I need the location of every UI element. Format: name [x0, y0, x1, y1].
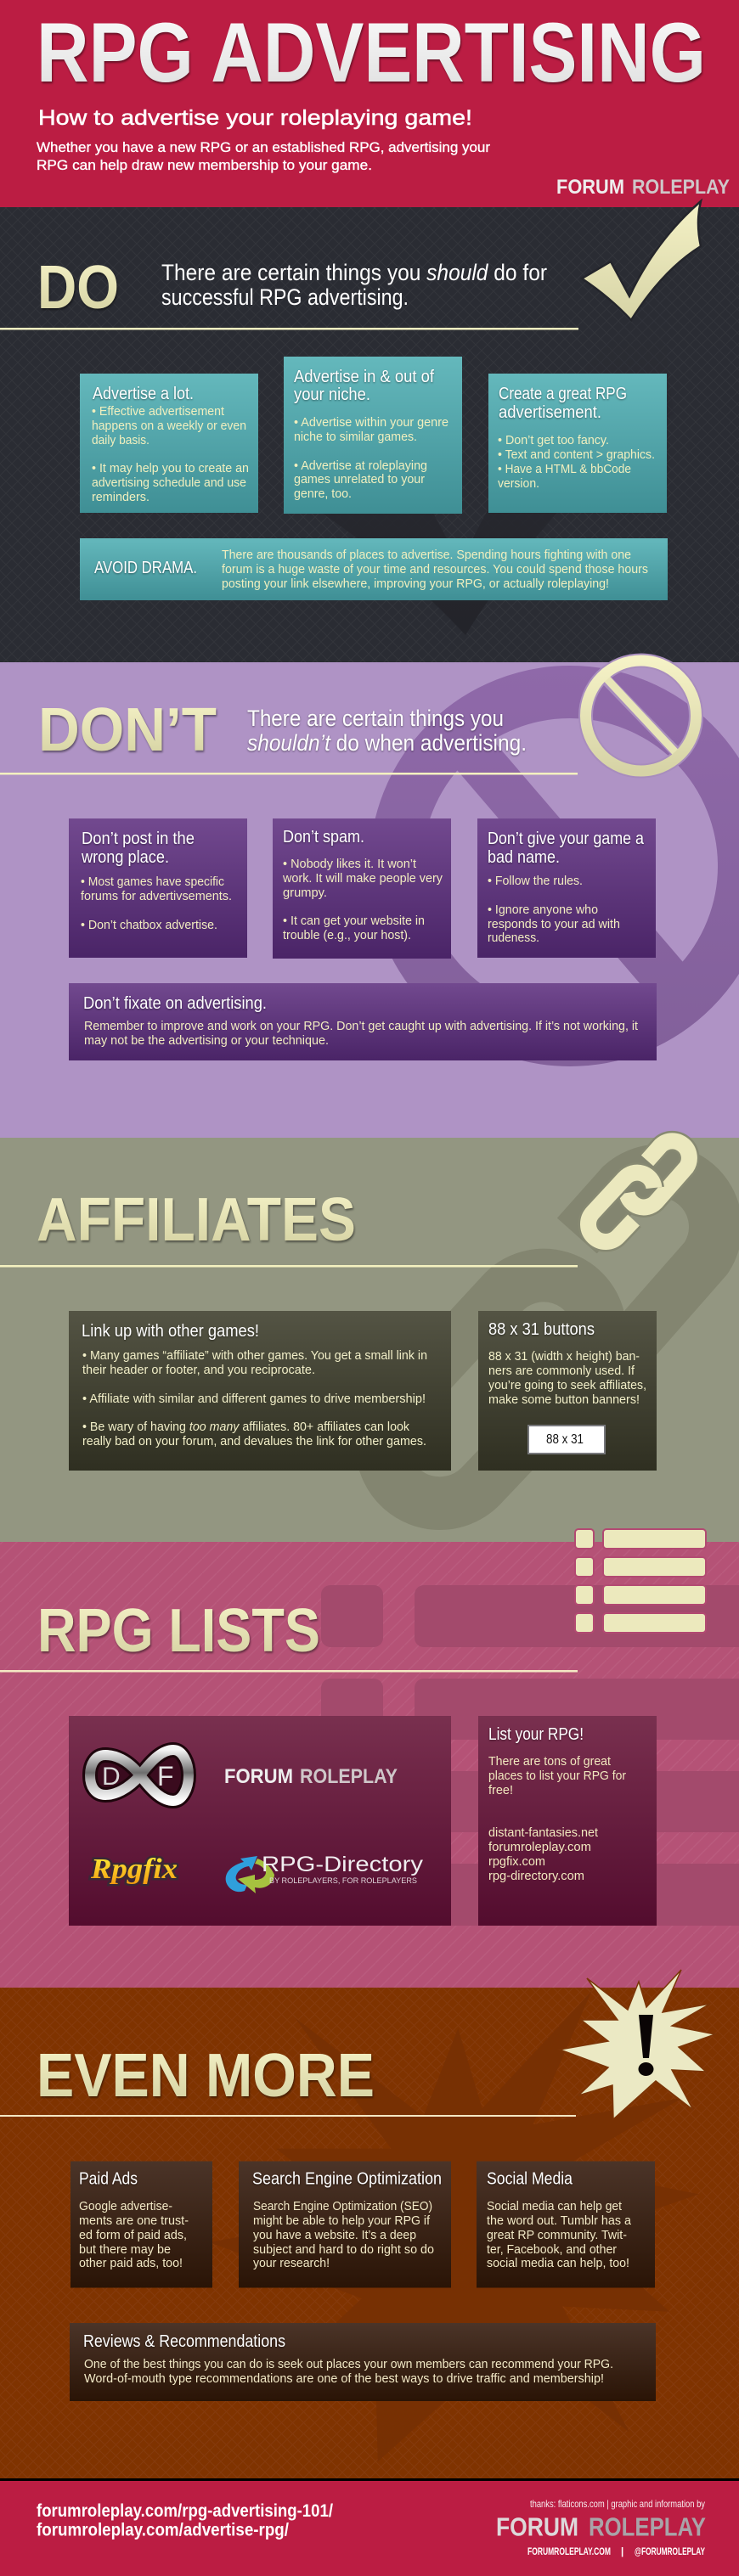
logo: forum roleplay: FORUM: [224, 1765, 293, 1788]
card text: ners are commonly used. If: [488, 1364, 635, 1378]
card text: • It may help you to create an: [92, 461, 249, 475]
footer social links: [527, 2547, 705, 2557]
card heading: [81, 830, 195, 867]
card text: your research!: [253, 2256, 330, 2270]
card text: [282, 857, 443, 942]
card: list your rpg: [478, 1716, 657, 1926]
card text: • Advertise within your genre: [294, 415, 448, 430]
footer social links: FORUMROLEPLAY.COM: [527, 2547, 611, 2557]
card text: • Ignore anyone who: [488, 903, 598, 917]
card text: but there may be: [79, 2242, 171, 2257]
card text: [84, 1019, 639, 1048]
do intro: successful RPG advertising.: [161, 284, 409, 310]
card text: their header or footer, and you reciprocate.: [82, 1363, 315, 1377]
logo: forum roleplay: ROLEPLAY: [589, 2511, 706, 2542]
icon: prohibition sign: [586, 661, 697, 771]
card text: free!: [488, 1783, 513, 1797]
card background: [239, 2162, 451, 2287]
card text: ments are one trust-: [79, 2213, 189, 2228]
card background: [477, 2162, 655, 2287]
logo: rpg-directory: BY ROLEPLAYERS, FOR ROLEPLAYERS: [269, 1876, 417, 1886]
card background: [69, 1716, 451, 1926]
card: logos: [69, 1716, 451, 1926]
icon: check mark: [582, 201, 701, 320]
card text: genre, too.: [294, 487, 352, 501]
card text: [81, 875, 232, 932]
card background: [69, 983, 657, 1060]
card text: games unrelated to your: [294, 472, 425, 487]
card background: [478, 1716, 657, 1926]
card text: • Many games “affiliate” with other games. You get a small link in: [82, 1348, 427, 1363]
card heading: Create a great RPG: [499, 385, 627, 403]
card heading: Advertise a lot.: [93, 385, 194, 403]
footer social links: @FORUMROLEPLAY: [635, 2547, 705, 2557]
card heading: 88 x 31 buttons: [488, 1320, 595, 1339]
card heading: Link up with other games!: [82, 1322, 259, 1341]
card: advertise a lot: [80, 374, 258, 513]
card text: [498, 433, 655, 491]
panel: even more: [0, 1970, 739, 2478]
card background: [71, 2162, 212, 2287]
card text: • Be wary of having too many affiliates. 80+ affiliates can look: [82, 1420, 409, 1434]
card: create a great rpg advertisement: [488, 374, 667, 513]
card text: niche to similar games.: [294, 430, 417, 444]
card heading: wrong place.: [81, 848, 169, 867]
background prohibition sign: [396, 692, 739, 1040]
even more background: [0, 1988, 739, 2478]
card text: trouble (e.g., your host).: [283, 928, 411, 942]
card heading: [294, 368, 434, 404]
lists background: [0, 1542, 739, 1988]
card heading: bad name.: [488, 848, 560, 867]
logo: forum roleplay: [224, 1765, 398, 1788]
card background: [488, 374, 667, 513]
card text: the word out. Tumblr has a: [487, 2213, 632, 2228]
card text: might be able to help your RPG if: [253, 2213, 431, 2228]
heading: don't: DON’T: [38, 696, 217, 764]
subtitle: How to advertise your roleplaying game!: [38, 106, 472, 130]
card background: [273, 818, 451, 959]
card: social media: [477, 2162, 655, 2287]
card text: • Nobody likes it. It won’t: [283, 857, 417, 871]
card text: [253, 2199, 434, 2270]
card text: forumroleplay.com: [488, 1840, 591, 1854]
card: reviews and recommendations: [70, 2323, 656, 2401]
card text: posting your link elsewhere, improving your RPG, or actually roleplaying!: [222, 577, 609, 591]
card: spam: [273, 818, 451, 959]
logo: distant fantasies: F: [157, 1761, 174, 1791]
card text: work. It will make people very: [282, 871, 443, 886]
card text: rpgfix.com: [488, 1854, 545, 1869]
card text: [82, 1348, 427, 1448]
card text: version.: [498, 476, 539, 491]
card background: [80, 374, 258, 513]
card heading: Paid Ads: [79, 2170, 138, 2189]
background check mark: [318, 278, 674, 635]
footer social links: |: [621, 2547, 623, 2557]
logo: forum roleplay: ROLEPLAY: [300, 1765, 398, 1788]
do intro: [161, 260, 547, 310]
background star: [209, 1991, 699, 2461]
card text: places to list your RPG for: [488, 1769, 626, 1783]
card text: [79, 2199, 189, 2270]
card text: [488, 874, 620, 945]
card heading: Social Media: [487, 2170, 573, 2189]
card background: [69, 818, 247, 958]
background chain link: [382, 1171, 715, 1504]
card text: • Effective advertisement: [92, 404, 225, 419]
don't intro: [247, 706, 527, 756]
background list shapes: [321, 1585, 739, 1926]
card text: Remember to improve and work on your RPG. Don’t get caught up with advertising. If it’s not working, it: [84, 1019, 639, 1033]
card text: ed form of paid ads,: [79, 2228, 187, 2242]
card text: forum is a huge waste of your time and resources. You could spend those hours: [222, 562, 648, 577]
card text: great RP community. Twit-: [487, 2228, 627, 2242]
do background: [0, 207, 739, 662]
card background: [80, 538, 668, 600]
card text: distant-fantasies.net: [488, 1825, 599, 1840]
logo: rpgfix: Rpgfix: [90, 1853, 178, 1885]
header background: [0, 0, 739, 207]
do intro: There are certain things you should do for: [161, 260, 547, 285]
card: link up: [69, 1311, 451, 1471]
card text: [92, 404, 249, 504]
card heading: advertisement.: [499, 403, 601, 422]
sample 88 x 31 button: 88 x 31: [546, 1432, 584, 1447]
card text: social media can help, too!: [487, 2256, 629, 2270]
card: 88 x 31 buttons: [478, 1311, 657, 1471]
card heading: Don’t post in the: [82, 830, 195, 848]
card: bad name: [477, 818, 656, 958]
panel: affiliates: [0, 1138, 739, 1542]
card text: • Text and content > graphics.: [498, 447, 655, 462]
icon: exclamation star: [560, 1970, 715, 2119]
card text: • Don’t chatbox advertise.: [81, 918, 217, 932]
card: advertise in and out of your niche: [284, 357, 462, 514]
card text: responds to your ad with: [488, 917, 620, 931]
card text: Search Engine Optimization (SEO): [253, 2199, 432, 2213]
card text: • Advertise at roleplaying: [294, 458, 427, 473]
card text: One of the best things you can do is seek out places your own members can recommend your RPG.: [84, 2357, 613, 2371]
card text: [222, 548, 648, 591]
intro text: [37, 139, 490, 173]
card text: • Most games have specific: [81, 875, 224, 889]
card heading: Reviews & Recommendations: [83, 2332, 285, 2351]
icon: chain link: [589, 1141, 689, 1241]
card: avoid drama: [80, 538, 668, 600]
card: paid ads: [71, 2162, 212, 2287]
card text: Word-of-mouth type recommendations are one of the best ways to drive traffic and membership!: [84, 2371, 604, 2386]
logo: forum roleplay: [496, 2511, 706, 2542]
don't background: [0, 662, 739, 1138]
card text: [488, 1349, 646, 1407]
logo: rpg-directory: RPG-Directory: [262, 1853, 424, 1876]
card heading: AVOID DRAMA.: [94, 559, 197, 577]
card heading: your niche.: [294, 385, 370, 404]
card heading: Don’t spam.: [283, 828, 364, 846]
card text: Social media can help get: [487, 2199, 623, 2213]
panel: don't: [0, 661, 739, 1138]
logo: distant fantasies: D: [102, 1763, 121, 1791]
card text: you’re going to seek affiliates,: [488, 1378, 646, 1392]
card text: [294, 415, 448, 501]
card background: [284, 357, 462, 514]
card heading: Search Engine Optimization: [252, 2170, 442, 2189]
panel: do: [0, 201, 739, 662]
heading: affiliates: AFFILIATES: [37, 1186, 356, 1254]
don't intro: shouldn’t do when advertising.: [247, 730, 527, 756]
panel: footer: [0, 2478, 739, 2576]
logo: forum roleplay: FORUM: [556, 176, 624, 199]
don't intro: There are certain things you: [247, 706, 504, 731]
card text: 88 x 31 (width x height) ban-: [488, 1349, 640, 1364]
card text: make some button banners!: [488, 1392, 640, 1407]
card text: There are thousands of places to advertise. Spending hours fighting with one: [222, 548, 631, 562]
card text: reminders.: [92, 490, 149, 504]
card text: grumpy.: [283, 886, 327, 900]
card heading: Don’t give your game a: [488, 830, 645, 848]
card: search engine optimization: [239, 2162, 451, 2287]
card text: Google advertise-: [79, 2199, 172, 2213]
footer links: [37, 2501, 333, 2540]
card: don't fixate: [69, 983, 657, 1060]
card heading: Don’t fixate on advertising.: [83, 994, 267, 1013]
intro text: Whether you have a new RPG or an established RPG, advertising your: [37, 139, 490, 155]
card text: rpg-directory.com: [488, 1869, 584, 1883]
card text: daily basis.: [92, 433, 149, 447]
card text: [84, 2357, 613, 2386]
intro text: RPG can help draw new membership to your game.: [37, 157, 372, 173]
panel: rpg lists: [0, 1529, 739, 1988]
card text: may not be the advertising or your technique.: [84, 1033, 329, 1048]
card text: rudeness.: [488, 931, 539, 945]
card text: forums for advertivsements.: [81, 889, 232, 903]
footer background: [0, 2481, 739, 2576]
card text: subject and hard to do right so do: [253, 2242, 434, 2257]
card text: [487, 2199, 632, 2270]
card heading: List your RPG!: [488, 1725, 584, 1744]
card text: [488, 1754, 626, 1883]
card heading: [488, 830, 645, 867]
card background: [70, 2323, 656, 2401]
card background: [478, 1311, 657, 1471]
card text: • Don’t get too fancy.: [498, 433, 609, 447]
card text: advertising schedule and use: [92, 475, 246, 490]
card text: • Have a HTML & bbCode: [498, 462, 631, 476]
card text: • It can get your website in: [283, 914, 425, 928]
footer links: forumroleplay.com/advertise-rpg/: [37, 2520, 289, 2540]
heading: rpg lists: RPG LISTS: [37, 1597, 320, 1665]
footer links: forumroleplay.com/rpg-advertising-101/: [37, 2501, 333, 2521]
card text: • Affiliate with similar and different games to drive membership!: [82, 1392, 426, 1406]
card: wrong place: [69, 818, 247, 958]
logo: rpg-directory: [226, 1853, 424, 1893]
card text: • Follow the rules.: [488, 874, 583, 888]
card text: you have a website. It’s a deep: [253, 2228, 416, 2242]
card text: other paid ads, too!: [79, 2256, 183, 2270]
sample 88 x 31 button: [528, 1426, 605, 1454]
logo: forum roleplay: [556, 176, 730, 199]
card text: There are tons of great: [488, 1754, 612, 1769]
card text: ter, Facebook, and other: [487, 2242, 617, 2257]
heading: even more: EVEN MORE: [37, 2042, 375, 2110]
card heading: [499, 385, 627, 422]
card background: [477, 818, 656, 958]
affiliates background: [0, 1138, 739, 1542]
heading: do: DO: [37, 254, 119, 322]
card heading: Advertise in & out of: [294, 368, 434, 386]
card text: really bad on your forum, and devalues the link for other games.: [82, 1434, 426, 1448]
logo: distant fantasies: [90, 1750, 189, 1801]
icon: list: [575, 1529, 706, 1633]
card background: [69, 1311, 451, 1471]
logo: forum roleplay: FORUM: [496, 2511, 578, 2542]
card text: happens on a weekly or even: [92, 419, 246, 433]
panel: header: [0, 0, 739, 207]
